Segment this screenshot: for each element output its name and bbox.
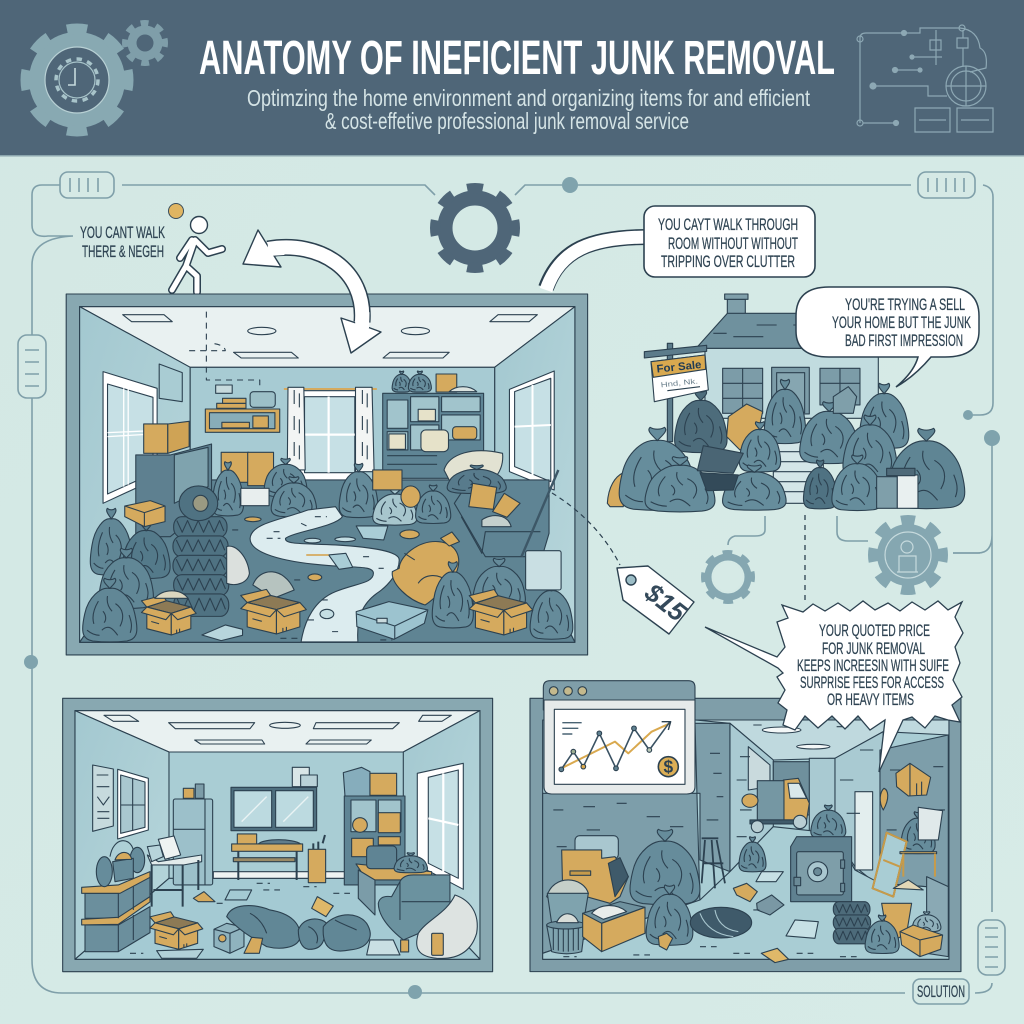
- dashed price line: [552, 493, 620, 565]
- back boxes: [221, 452, 249, 482]
- connector dots: [24, 177, 1000, 999]
- open box: [583, 902, 645, 923]
- panel: lower right room with chart: [530, 681, 961, 972]
- left window: [118, 769, 148, 839]
- tab: top right: [918, 172, 975, 198]
- poster: [93, 765, 113, 831]
- appliance: [877, 477, 897, 508]
- panel: cluttered main room: [66, 294, 588, 655]
- desk: [356, 864, 432, 880]
- left bookcase and box: [136, 444, 212, 537]
- icon: circuit diagram: [857, 25, 993, 132]
- floor debris specks: [130, 883, 350, 953]
- callout: cannot walk through: [644, 206, 815, 277]
- umbrella stand: [308, 849, 326, 883]
- tab: left: [18, 335, 46, 398]
- callout: cannot walk through: TRIPPING OVER CLUTTER: [661, 252, 795, 271]
- callout: cannot walk through: ROOM WITHOUT WITHOUT: [668, 234, 798, 253]
- right junk: [833, 902, 870, 917]
- front right bags and box: [432, 558, 573, 639]
- header banner: [0, 0, 1024, 156]
- floor items: [245, 517, 419, 581]
- boxes front: [141, 595, 196, 635]
- old monitor and basket: [697, 446, 743, 473]
- floor debris specks: [232, 517, 392, 640]
- back bookshelf: [383, 393, 484, 478]
- text: you cant walk: [80, 223, 165, 261]
- birdhouse: [880, 763, 931, 810]
- ceiling lights: [123, 315, 537, 358]
- walls: [543, 723, 730, 953]
- floor debris specks: [563, 910, 857, 957]
- solution label: SOLUTION: [917, 982, 965, 1001]
- back bags: [212, 458, 451, 525]
- browser chart window: [543, 681, 695, 794]
- house: [696, 294, 878, 503]
- browser chart window: $: [663, 757, 673, 777]
- for sale sign: Hnd, Nk.: [660, 376, 698, 389]
- callout: surprise fees burst: FOR JUNK REMOVAL: [822, 639, 925, 658]
- for sale sign: [644, 343, 708, 442]
- icon: person gear: [874, 521, 942, 589]
- solution label: [913, 979, 969, 1004]
- suitcase: [356, 602, 428, 639]
- icon: large gear with clock: [26, 29, 128, 131]
- back window: [231, 787, 317, 831]
- stool: [702, 838, 725, 888]
- cabinet top items: [96, 841, 145, 887]
- arrow: curved arrow into room: [243, 230, 381, 353]
- cube: [214, 923, 244, 953]
- yellow box: [727, 404, 763, 450]
- lights: [104, 715, 451, 744]
- couch and cushions: [454, 480, 549, 557]
- long bags: [227, 906, 370, 951]
- callout: surprise fees burst: YOUR QUOTED PRICE: [819, 621, 930, 640]
- subtitle: & cost-effetive professional junk removal service: [325, 108, 689, 134]
- panel: tidy-ish lower left room: [63, 698, 493, 972]
- white sack: [417, 895, 477, 958]
- bags mid: [739, 805, 935, 872]
- floor path: [250, 507, 399, 642]
- icon: small gear: [125, 23, 165, 63]
- fridge: [173, 799, 213, 885]
- brick marks: [553, 725, 945, 860]
- icon: running figure: [168, 204, 222, 292]
- icon: price tag: [617, 566, 694, 634]
- subtitle: Optimzing the home environment and organizing items for and efficient: [247, 85, 810, 111]
- connectors under house: [728, 516, 980, 553]
- floor items: [193, 892, 215, 902]
- floor scraps: [733, 883, 757, 902]
- callout: trying to sell: [796, 287, 979, 387]
- bags behind: [675, 379, 965, 509]
- text: you cant walk: THERE & NEGEH: [82, 242, 164, 261]
- dark tire: [690, 907, 752, 938]
- right bookcase: [344, 796, 405, 885]
- left junk: [575, 836, 618, 859]
- tire stack: [173, 517, 229, 616]
- icon: small ring gear: [704, 553, 752, 601]
- side table: [147, 855, 202, 865]
- connector lines frame: [32, 185, 993, 993]
- small box: [125, 501, 165, 527]
- window left: [103, 372, 157, 503]
- ceiling: [695, 720, 949, 760]
- wall shelf: [205, 409, 280, 432]
- tab: top left: [60, 172, 114, 198]
- bags front: [619, 422, 883, 512]
- yellow bag: [392, 542, 459, 605]
- callout: surprise fees burst: OR HEAVY ITEMS: [827, 690, 914, 709]
- truck: [742, 778, 809, 833]
- armchair: [378, 875, 450, 940]
- for sale sign: For Sale: [656, 359, 702, 376]
- left cabinets: [85, 877, 150, 918]
- tab: right: [978, 920, 1005, 975]
- arrow: callout tail curve: [546, 237, 650, 290]
- left bags: [83, 508, 170, 642]
- center window: [300, 391, 359, 480]
- icon: price tag: $15: [639, 576, 692, 628]
- text: you cant walk: YOU CANT WALK: [80, 223, 165, 242]
- panel: house for sale with bags: [607, 294, 965, 512]
- floor: [543, 827, 949, 959]
- callout: cannot walk through: YOU CAYT WALK THROUGH: [658, 215, 798, 234]
- window right: [509, 371, 554, 490]
- yellow frame and shelf: [873, 833, 907, 897]
- subtitle: [247, 85, 810, 134]
- steps: [773, 442, 823, 503]
- callout: surprise fees burst: [705, 601, 963, 772]
- safe: [791, 837, 852, 902]
- table: [232, 844, 303, 851]
- icon: central gear: [435, 188, 515, 268]
- right window: [417, 763, 463, 889]
